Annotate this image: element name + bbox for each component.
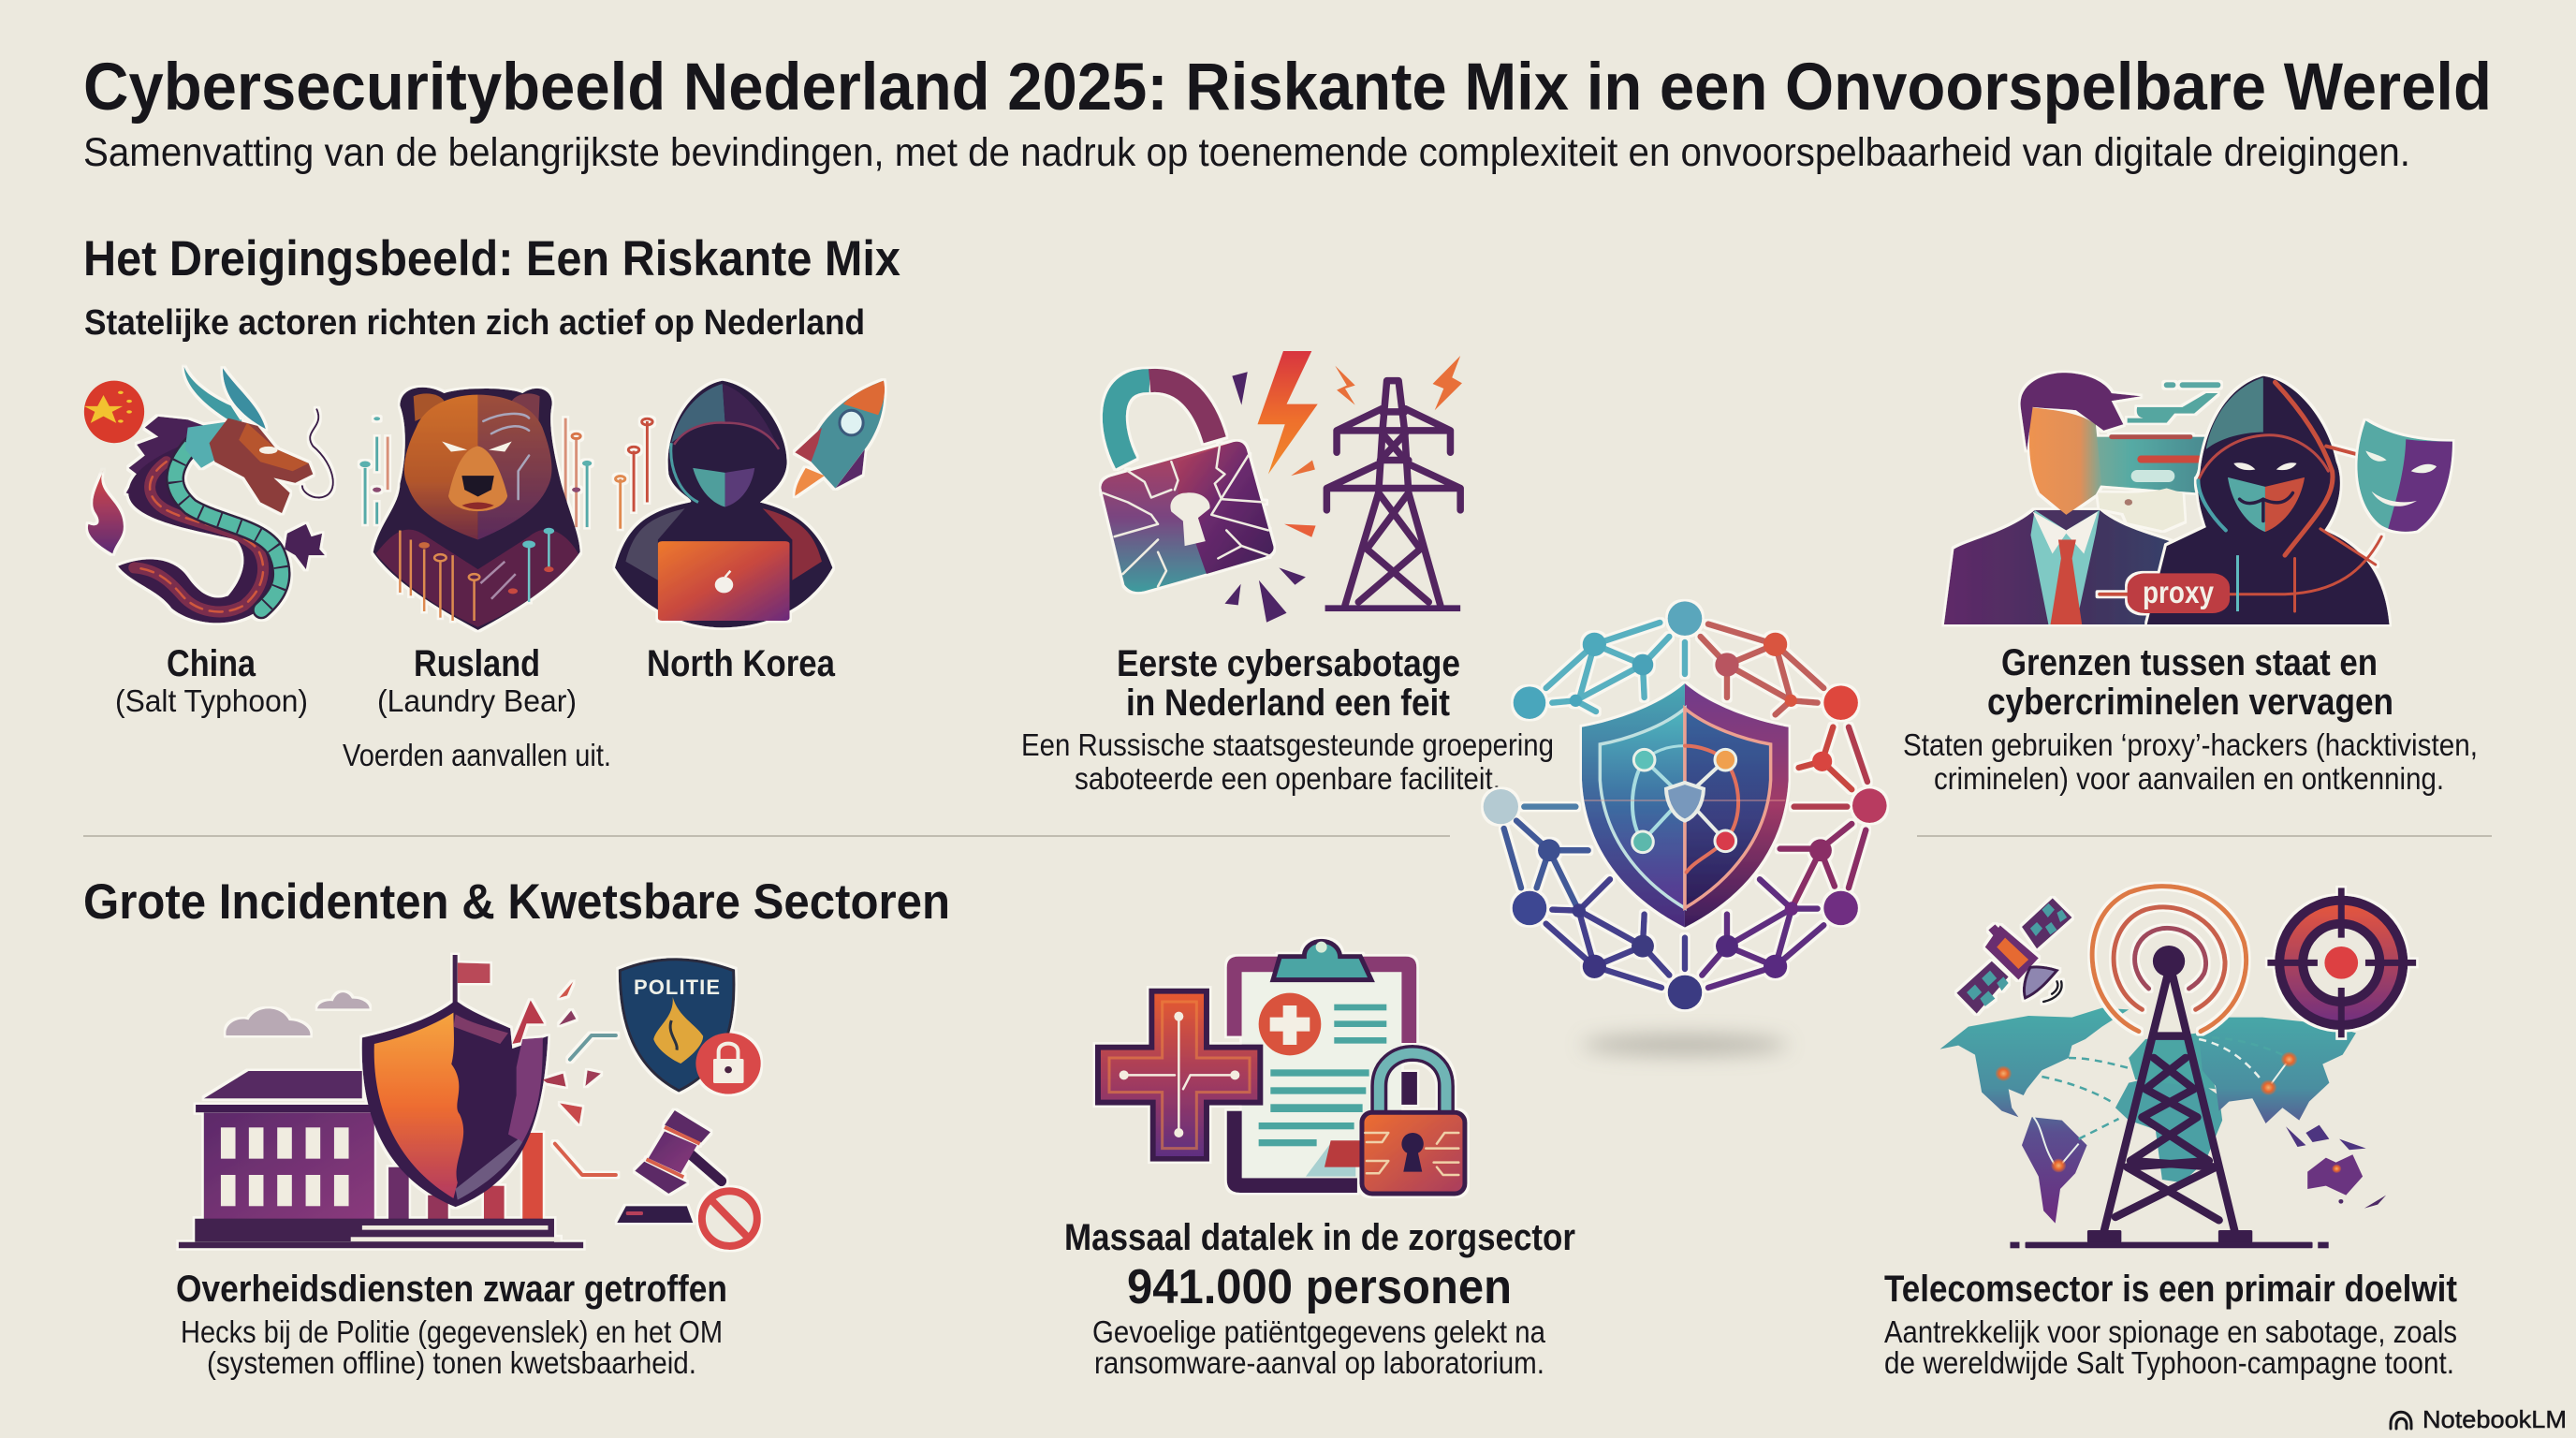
icon: china flag bbox=[84, 381, 144, 443]
icon: businessman dissolving into data bbox=[1944, 373, 2226, 624]
flag bbox=[453, 955, 458, 1004]
text: telecom sector: Aantrekkelijk voor spionage en sabotage, zoals bbox=[1884, 1314, 2457, 1349]
text: state versus criminals bbox=[1903, 642, 2478, 796]
text: state versus criminals: cybercriminelen vervagen bbox=[1987, 682, 2393, 723]
icon: medical cross, clipboard and padlock bbox=[1095, 941, 1465, 1194]
building bbox=[204, 1071, 362, 1098]
icon: bear bbox=[359, 388, 592, 630]
divider left bbox=[83, 835, 1450, 837]
footer: NotebookLM brand: NotebookLM bbox=[2422, 1405, 2567, 1433]
shards bbox=[512, 1000, 544, 1044]
icon: satellite bbox=[1956, 898, 2072, 1014]
title: Cybersecuritybeeld Nederland 2025: Riskante Mix in een Onvoorspelbare Wereld bbox=[83, 51, 2492, 125]
icon: telecom tower bbox=[2010, 946, 2329, 1248]
text: data leak in healthcare: 941.000 personen bbox=[1127, 1260, 1512, 1314]
decorative circuit pins bbox=[616, 418, 652, 529]
text: data leak in healthcare: ransomware-aanval op laboratorium. bbox=[1094, 1345, 1544, 1380]
shadow under network bbox=[1582, 1034, 1788, 1055]
icon: target bbox=[2267, 888, 2416, 1037]
label: China: (Salt Typhoon) bbox=[115, 683, 308, 718]
sub heading: state actors: Statelijke actoren richten zich actief op Nederland bbox=[84, 303, 865, 343]
label: Rusland: (Laundry Bear) bbox=[377, 683, 577, 718]
text: data leak in healthcare: Gevoelige patiëntgegevens gelekt na bbox=[1092, 1314, 1546, 1349]
clouds bbox=[226, 1008, 310, 1035]
police badge text: POLITIE bbox=[634, 976, 720, 999]
text: first cyber sabotage bbox=[1021, 643, 1554, 796]
icon: central network shield bbox=[1484, 601, 1887, 1009]
text: telecom sector bbox=[1884, 1269, 2457, 1380]
text: data leak in healthcare: Massaal datalek in de zorgsector bbox=[1064, 1217, 1575, 1258]
icon: hooded figure with proxy tag bbox=[2100, 376, 2390, 624]
icon: signal rings bbox=[2092, 887, 2247, 1032]
text: telecom sector: Telecomsector is een primair doelwit bbox=[1884, 1269, 2457, 1310]
text: state versus criminals: Staten gebruiken ‘proxy’-hackers (hacktivisten, bbox=[1903, 727, 2478, 762]
icon: gavel with prohibition sign bbox=[617, 1110, 757, 1246]
label: China: China bbox=[167, 643, 256, 684]
icon: dragon bbox=[88, 367, 333, 623]
icon: police badge bbox=[620, 960, 761, 1094]
icon: lightning and shards bbox=[1224, 351, 1462, 623]
text: first cyber sabotage: saboteerde een openbare faciliteit. bbox=[1075, 761, 1500, 796]
icon: world map bbox=[1939, 1008, 2386, 1224]
text: government services hit: Overheidsdiensten zwaar getroffen bbox=[176, 1269, 727, 1310]
base and steps bbox=[195, 1219, 554, 1242]
caption: carried out attacks: Voerden aanvallen uit. bbox=[343, 738, 611, 772]
icon: broken padlock bbox=[1101, 380, 1273, 592]
circuit lines beside bear bbox=[359, 417, 592, 527]
text: government services hit: Hecks bij de Politie (gegevenslek) en het OM bbox=[181, 1314, 723, 1349]
cross bbox=[1095, 989, 1263, 1162]
subtitle: Samenvatting van de belangrijkste bevindingen, met de nadruk op toenemende complexiteit en onvoorspelbaarheid van digitale dreigingen. bbox=[83, 130, 2410, 175]
text: first cyber sabotage: Eerste cybersabotage bbox=[1117, 643, 1460, 684]
divider right bbox=[1917, 835, 2492, 837]
icon: hooded hacker with laptop bbox=[615, 381, 832, 627]
text: government services hit: (systemen offline) tonen kwetsbaarheid. bbox=[207, 1345, 696, 1380]
text: telecom sector: de wereldwijde Salt Typhoon-campagne toont. bbox=[1884, 1345, 2454, 1380]
section heading: threat picture: Het Dreigingsbeeld: Een Riskante Mix bbox=[83, 231, 900, 286]
icon: rocket bbox=[795, 381, 885, 496]
text: first cyber sabotage: in Nederland een feit bbox=[1126, 682, 1450, 724]
icon: power pylon bbox=[1325, 381, 1460, 611]
clipboard bbox=[1227, 957, 1416, 1043]
label: North Korea: North Korea bbox=[647, 643, 836, 684]
icon: government building and broken shield bbox=[179, 955, 616, 1248]
text: state versus criminals: Grenzen tussen staat en bbox=[2001, 642, 2378, 683]
padlock bbox=[1379, 1053, 1446, 1117]
text: government services hit bbox=[176, 1269, 727, 1380]
columns bbox=[388, 1167, 409, 1220]
text: state versus criminals: criminelen) voor aanvailen en ontkenning. bbox=[1934, 761, 2444, 796]
proxy label: proxy bbox=[2143, 575, 2215, 609]
label: Rusland bbox=[377, 643, 577, 718]
record lines bbox=[1259, 1005, 1386, 1146]
icon: theatre mask bbox=[2357, 420, 2452, 532]
text: data leak in healthcare bbox=[1064, 1217, 1575, 1380]
label: China bbox=[115, 643, 308, 718]
label: Rusland: Rusland bbox=[414, 643, 540, 684]
text: first cyber sabotage: Een Russische staatsgesteunde groepering bbox=[1021, 727, 1554, 762]
shield bbox=[362, 1000, 548, 1207]
section heading: incidents: Grote Incidenten & Kwetsbare Sectoren bbox=[83, 874, 950, 930]
